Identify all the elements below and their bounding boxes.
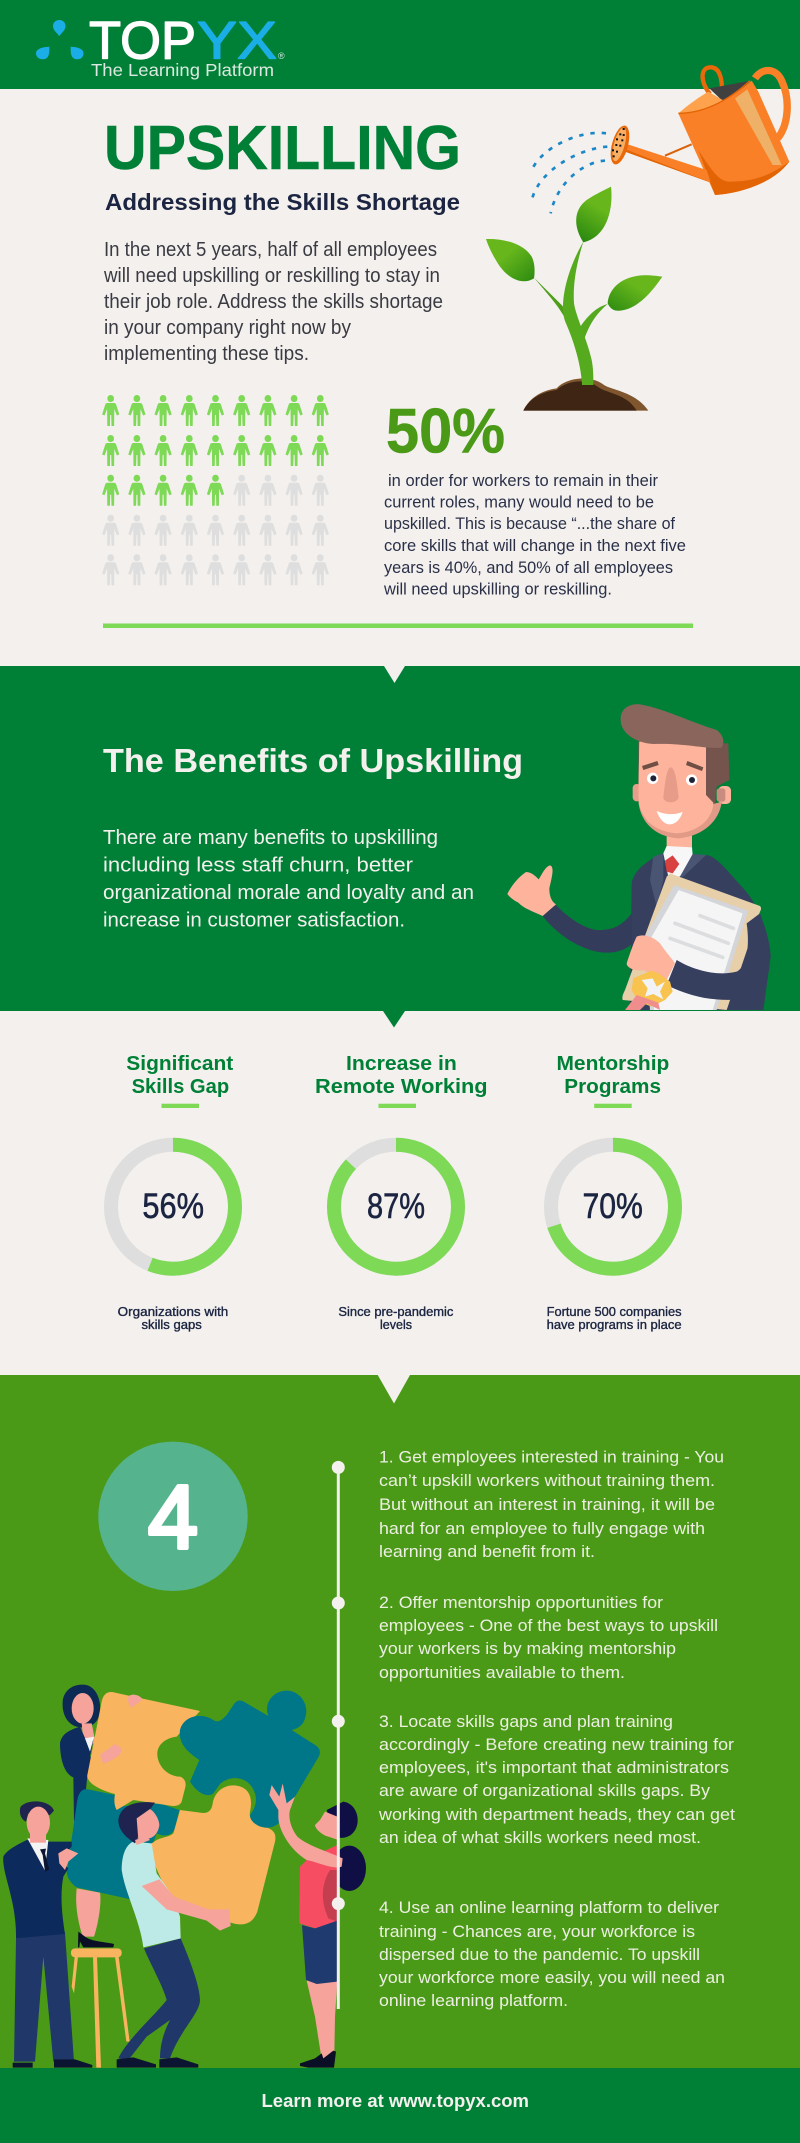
benefits text: There are many benefits to upskilling (103, 827, 438, 849)
tip 2 (379, 1594, 718, 1682)
benefits text: increase in customer satisfaction. (103, 910, 405, 932)
notch arrow (378, 1375, 410, 1404)
row 3 filled (102, 475, 224, 506)
stat: significant skills gap (111, 1052, 235, 1332)
stat heading: Significant (126, 1052, 233, 1075)
stat description: in order for workers to remain in their (388, 472, 658, 490)
row 1 (102, 395, 329, 426)
stat description: current roles, many would need to be (384, 494, 654, 512)
caption (118, 1305, 228, 1332)
badge: number 4: 4 (148, 1468, 198, 1568)
subtitle: Addressing the Skills Shortage (105, 189, 460, 215)
caption: Organizations with (118, 1305, 228, 1319)
tip 2: opportunities available to them. (379, 1664, 625, 1682)
man lifting (117, 1802, 231, 2068)
caption: levels (380, 1318, 412, 1332)
puzzle piece: orange top (87, 1692, 200, 1810)
man in suit (3, 1801, 92, 2068)
puzzle piece: teal left (67, 1789, 179, 1900)
badge: number 4 (98, 1442, 248, 1591)
intro text block: implementing these tips. (104, 343, 309, 365)
stat heading: Remote Working (315, 1075, 488, 1098)
stat: 50%: 50% (386, 396, 505, 466)
tip 1 (379, 1449, 724, 1561)
tip 3: 3. Locate skills gaps and plan training (379, 1713, 673, 1731)
intro text block: In the next 5 years, half of all employees (104, 239, 437, 261)
stat: increase in remote working (315, 1052, 488, 1332)
tip 4: your workforce more easily, you will need an (379, 1969, 725, 1987)
tip 3 (378, 1713, 735, 1847)
caption: have programs in place (547, 1318, 682, 1332)
intro text block: in your company right now by (104, 317, 351, 339)
header band with logo (0, 0, 800, 89)
stat: mentorship programs (547, 1052, 682, 1332)
intro text block: will need upskilling or reskilling to stay in (103, 265, 440, 287)
divider bar (103, 624, 693, 628)
notch arrow (384, 666, 405, 683)
tip 4: 4. Use an online learning platform to deliver (379, 1899, 720, 1917)
tip 1: 1. Get employees interested in training - You (379, 1449, 724, 1467)
logo registered mark: ® (278, 51, 285, 61)
stat heading (126, 1052, 233, 1098)
tip 1: can’t upskill workers without training them. (379, 1472, 715, 1490)
illustration: watering can (532, 67, 789, 213)
people pictogram: 23 of 45 filled (102, 395, 329, 585)
puzzle piece: orange bottom (147, 1785, 275, 1924)
stat heading: Skills Gap (132, 1075, 229, 1098)
intro text block (103, 239, 443, 365)
stat heading: Mentorship (556, 1052, 669, 1075)
benefits text (103, 827, 474, 932)
benefits text: including less staff churn, better (103, 854, 413, 876)
tip 3: accordingly - Before creating new training for (379, 1736, 735, 1754)
woman on stool (60, 1685, 114, 1947)
logo tagline: The Learning Platform (91, 60, 274, 80)
illustration: businessman with certificate (507, 704, 771, 1010)
stat description: upskilled. This is because “...the share of (384, 515, 675, 533)
stool (71, 1948, 130, 2068)
footer link text: Learn more at www.topyx.com (262, 2091, 529, 2111)
caption (338, 1305, 453, 1332)
tip 3: an idea of what skills workers need most. (379, 1829, 701, 1847)
tip 4: training - Chances are, your workforce is (379, 1923, 695, 1941)
tip 2: your workers is by making mentorship (379, 1640, 676, 1658)
panel: benefits of upskilling (0, 666, 800, 1011)
tip 3: working with department heads, they can get (378, 1806, 735, 1824)
tip 1: learning and benefit from it. (379, 1543, 595, 1561)
donut chart: 56% (111, 1145, 235, 1269)
stat description (383, 472, 686, 598)
panel: four tips (0, 1375, 800, 2068)
tip 4 (379, 1899, 725, 2010)
heading: The Benefits of Upskilling (103, 742, 523, 779)
illustration: plant (486, 187, 662, 411)
intro text block: their job role. Address the skills shortage (104, 291, 443, 313)
stat heading (315, 1052, 488, 1098)
tip 1: But without an interest in training, it will be (379, 1496, 715, 1514)
footer band (0, 2068, 800, 2143)
rows 3 to 5 empty (102, 475, 329, 585)
puzzle piece: teal top right (180, 1691, 320, 1828)
tip 2: employees - One of the best ways to upskill (379, 1617, 718, 1635)
benefits text: organizational morale and loyalty and an (103, 882, 474, 904)
logo wordmark accent: YX (197, 12, 277, 70)
tip 1: hard for an employee to fully engage with (379, 1520, 705, 1538)
panel: key statistics (111, 1011, 682, 1332)
hands of woman on stool (100, 1695, 143, 1764)
woman reaching (269, 1783, 366, 2068)
donut chart: 56%: 56% (142, 1187, 204, 1226)
tip 3: employees, it's important that administrators (379, 1759, 729, 1777)
timeline (332, 1461, 345, 2009)
notch arrow (383, 1011, 405, 1028)
caption (547, 1305, 682, 1332)
tip 4: online learning platform. (379, 1992, 568, 2010)
stat heading: Programs (564, 1075, 661, 1098)
caption: Fortune 500 companies (547, 1305, 682, 1319)
icon: logo droplets (36, 20, 84, 59)
stat heading: Increase in (346, 1052, 457, 1075)
stat description: will need upskilling or reskilling. (383, 580, 612, 598)
logo wordmark: TOP (89, 12, 196, 70)
stat heading (556, 1052, 669, 1098)
caption: skills gaps (142, 1318, 202, 1332)
stat description: core skills that will change in the next five (384, 537, 686, 555)
title: upskilling: UPSKILLING (104, 114, 461, 183)
donut chart: 70%: 70% (582, 1187, 643, 1226)
row 2 (102, 435, 329, 466)
donut chart: 87%: 87% (367, 1187, 425, 1226)
illustration: team assembling puzzle (3, 1685, 366, 2068)
stat description: years is 40%, and 50% of all employees (384, 559, 673, 577)
tip 4: dispersed due to the pandemic. To upskill (379, 1946, 700, 1964)
caption: Since pre-pandemic (338, 1305, 453, 1319)
donut chart: 87% (334, 1145, 458, 1269)
tip 3: are aware of organizational skills gaps. By (379, 1782, 711, 1800)
water drops (532, 133, 607, 213)
tip 2: 2. Offer mentorship opportunities for (379, 1594, 664, 1612)
donut chart: 70% (551, 1145, 675, 1269)
